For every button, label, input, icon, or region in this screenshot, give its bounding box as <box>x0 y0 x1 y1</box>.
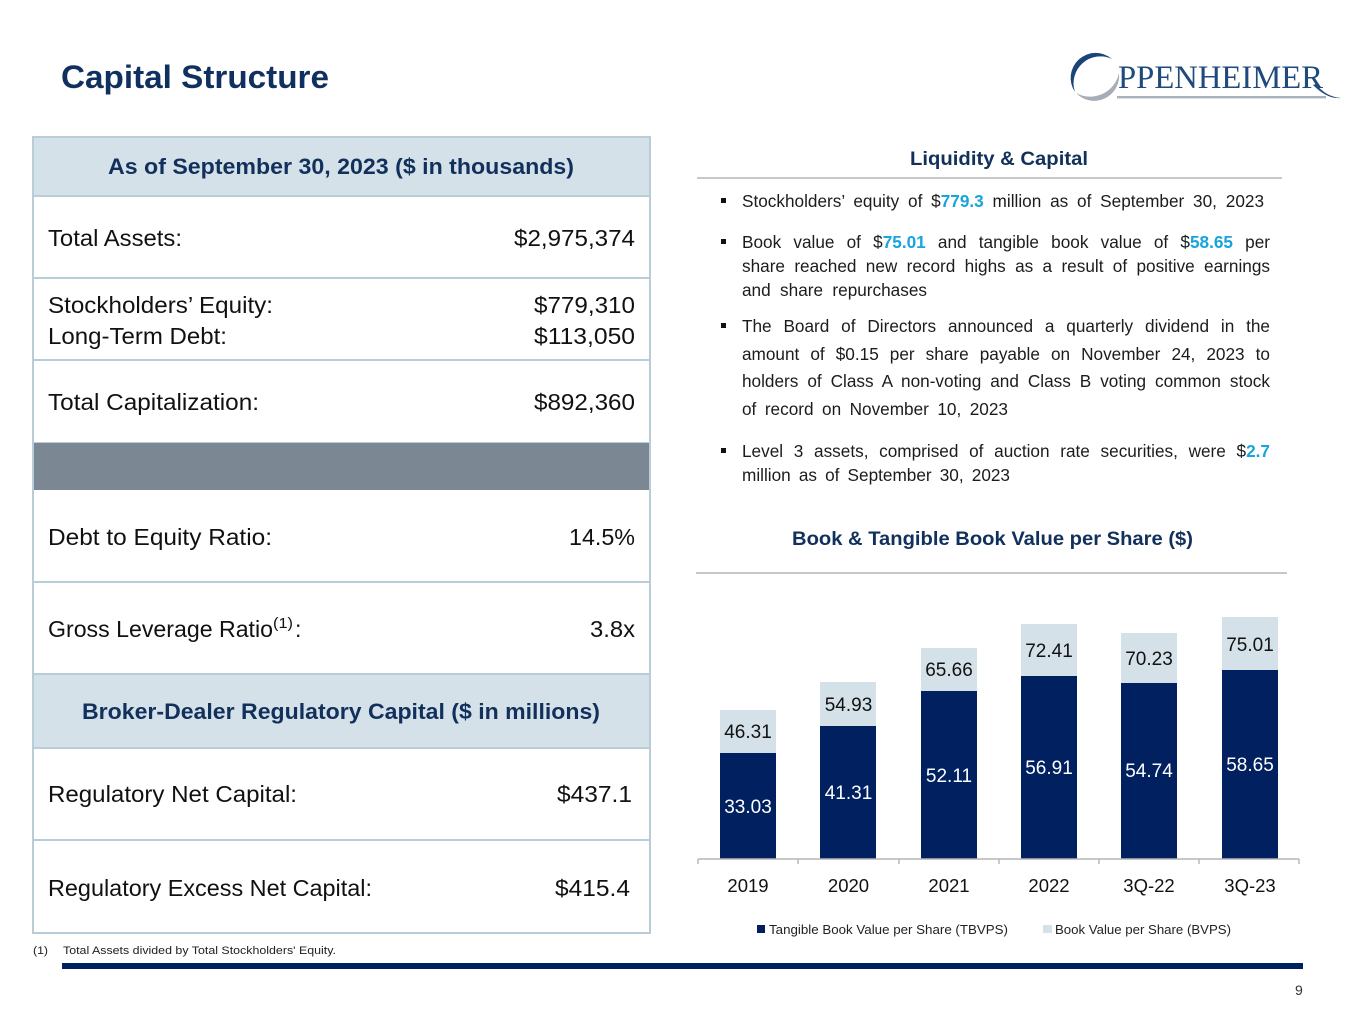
logo: Oppenheimer: PPENHEIMER <box>1118 60 1323 96</box>
bullet: level 3 assets: million as of September 30, 2023 <box>742 465 1010 485</box>
bullet: dividend: holders of Class A non-voting and Class B voting common stock <box>742 371 1270 391</box>
row: equity and debt: Stockholders’ Equity: <box>48 292 273 318</box>
value labels: tangible book value: 58.65 <box>1226 755 1274 776</box>
row: regulatory excess net capital: Regulatory Excess Net Capital: <box>48 875 372 901</box>
row: gross leverage: Gross Leverage Ratio <box>48 616 273 642</box>
bullet: dividend: of record on November 10, 2023 <box>742 399 1008 419</box>
bullet: book value: Book value of $75.01 and tangible book value of $58.65 per <box>742 232 1270 252</box>
value labels: book value <box>724 635 1274 743</box>
page number: 9 <box>1295 982 1303 998</box>
stacked bar chart <box>698 617 1299 937</box>
bullet: book value: share reached new record highs as a result of positive earnings <box>742 256 1270 276</box>
header: broker-dealer: Broker-Dealer Regulatory Capital ($ in millions) <box>82 699 600 724</box>
row: gross leverage: (1) <box>273 615 293 632</box>
row: total assets <box>48 225 635 251</box>
value labels: tangible book value: 54.74 <box>1125 761 1173 782</box>
value labels: book value: 65.66 <box>925 660 973 681</box>
row: debt to equity <box>48 524 635 550</box>
footnote: Total Assets divided by Total Stockholders' Equity. <box>63 945 336 957</box>
bullet: book value <box>721 232 1270 300</box>
row: equity and debt <box>48 292 635 349</box>
row: regulatory net capital: Regulatory Net Capital: <box>48 781 297 807</box>
footnote: (1) <box>33 945 48 957</box>
row: total capitalization: $892,360 <box>534 389 635 415</box>
row: total capitalization <box>48 389 635 415</box>
header: as of date <box>34 138 649 196</box>
value labels: tangible book value: 33.03 <box>724 797 772 818</box>
legend: Book Value per Share (BVPS) <box>1055 922 1231 937</box>
row dividers <box>33 196 650 840</box>
category labels: 2022 <box>1028 875 1070 896</box>
header: as of date: As of September 30, 2023 ($ in thousands) <box>108 154 574 179</box>
row: regulatory net capital: $437.1 <box>557 781 632 807</box>
bullet: stockholders equity: Stockholders’ equity of $779.3 million as of September 30, 2023 <box>742 191 1264 211</box>
value labels: book value: 75.01 <box>1226 635 1274 656</box>
axis <box>698 859 1299 864</box>
row: total assets: $2,975,374 <box>514 225 635 251</box>
bullet: book value: and share repurchases <box>742 280 927 300</box>
header: broker-dealer <box>34 675 649 747</box>
heading: liquidity and capital: Liquidity & Capital <box>910 148 1088 170</box>
category labels: 2020 <box>828 875 869 896</box>
legend <box>757 922 1231 937</box>
category labels: 2021 <box>928 875 970 896</box>
row: equity and debt: Long-Term Debt: <box>48 323 227 349</box>
footer bar <box>62 963 1303 969</box>
category labels: 2019 <box>727 875 769 896</box>
value labels: book value: 54.93 <box>825 695 872 716</box>
row: equity and debt: $779,310 <box>534 292 635 318</box>
row: total capitalization: Total Capitalization: <box>48 389 259 415</box>
value labels: tangible book value: 41.31 <box>825 783 872 804</box>
row: regulatory excess net capital <box>48 875 630 901</box>
bullet: level 3 assets: Level 3 assets, comprised of auction rate securities, were $2.7 <box>742 441 1270 461</box>
value labels: book value: 72.41 <box>1025 641 1073 662</box>
bars: book value per share <box>720 617 1278 753</box>
legend: Tangible Book Value per Share (TBVPS) <box>769 922 1008 937</box>
row: gross leverage: 3.8x <box>590 616 636 642</box>
row: total assets: Total Assets: <box>48 225 182 251</box>
category labels: 3Q-22 <box>1123 875 1175 896</box>
table frame <box>33 137 650 933</box>
heading: book value chart: Book & Tangible Book Value per Share ($) <box>792 528 1193 550</box>
bullet: dividend: The Board of Directors announced a quarterly dividend in the <box>742 316 1270 336</box>
value labels: tangible book value: 56.91 <box>1025 758 1073 779</box>
grey band <box>34 443 649 490</box>
value labels: book value: 46.31 <box>724 722 772 743</box>
bullet: dividend <box>721 316 1270 419</box>
row: regulatory excess net capital: $415.4 <box>555 875 630 901</box>
value labels: tangible book value <box>724 755 1274 818</box>
value labels: tangible book value: 52.11 <box>926 766 972 787</box>
row: gross leverage: : <box>295 616 301 642</box>
row: equity and debt: $113,050 <box>534 323 635 349</box>
title: Capital Structure <box>61 59 329 95</box>
row: gross leverage <box>48 615 636 642</box>
text block: liquidity bullets <box>721 191 1270 485</box>
value labels: book value: 70.23 <box>1125 649 1173 670</box>
row: regulatory net capital <box>48 781 632 807</box>
category labels <box>727 875 1276 896</box>
logo: Oppenheimer <box>1071 53 1341 101</box>
bullet: dividend: amount of $0.15 per share payable on November 24, 2023 to <box>742 344 1270 364</box>
row: debt to equity: 14.5% <box>569 524 635 550</box>
bars: tangible book value per share <box>720 670 1278 859</box>
row: debt to equity: Debt to Equity Ratio: <box>48 524 272 550</box>
category labels: 3Q-23 <box>1224 875 1276 896</box>
panel: capital table <box>33 137 650 933</box>
bullet: level 3 assets <box>721 441 1270 485</box>
